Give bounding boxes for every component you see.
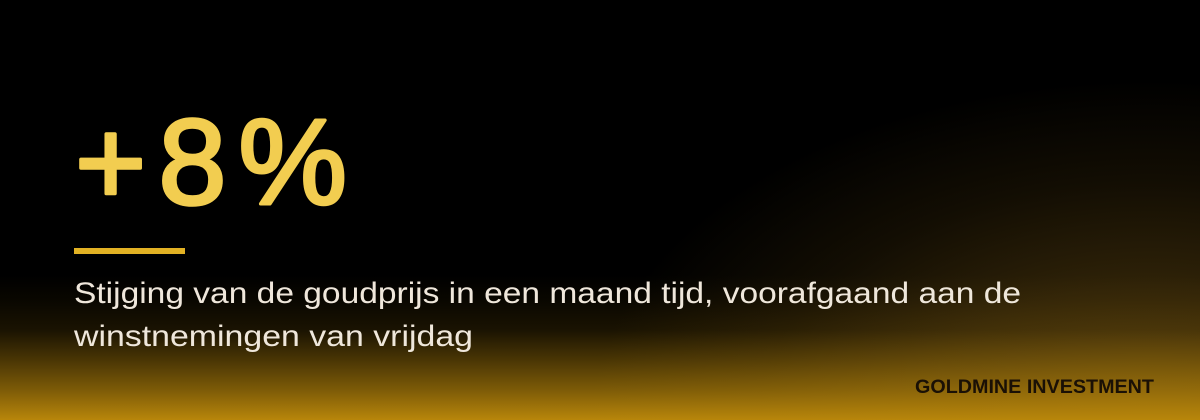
source label: GOLDMINE INVESTMENT (915, 377, 1154, 398)
big number: +8% (75, 94, 347, 230)
accent divider (74, 248, 185, 254)
description text: winstnemingen van vrijdag (73, 320, 473, 353)
description text (73, 277, 1021, 353)
description text: Stijging van de goudprijs in een maand tijd, voorafgaand aan de (74, 277, 1021, 310)
